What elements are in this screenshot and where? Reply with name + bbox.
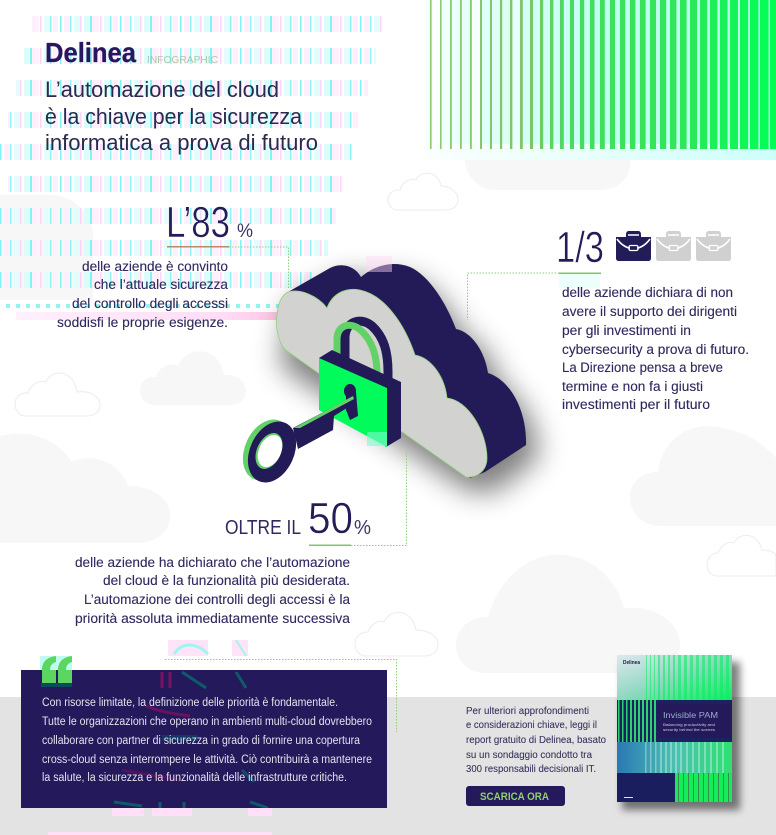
stat: one third: delle aziende dichiara di non	[562, 285, 733, 300]
download button: SCARICA ORA	[480, 791, 549, 803]
background clouds	[0, 150, 776, 673]
report cover: security behind the scenes	[663, 727, 715, 732]
glitch arcs above panel	[168, 640, 248, 656]
quote panel: cross-cloud senza interrompere le attività. Ciò contribuirà a mantenere	[42, 754, 372, 766]
stat: one third: per gli investimenti in	[562, 323, 691, 338]
stat: one third	[468, 223, 749, 412]
logo: INFOGRAPHIC	[147, 55, 218, 66]
stat: 83 percent	[57, 198, 288, 330]
stat: one third: investimenti per il futuro	[562, 397, 710, 412]
stat: over 50 percent	[75, 453, 406, 626]
stat: 83 percent: che l’attuale sicurezza	[94, 277, 228, 292]
stat: over 50 percent: priorità assoluta immediatamente successiva	[75, 611, 350, 626]
stat: over 50 percent: delle aziende ha dichiarato che l’automazione	[75, 555, 350, 570]
report cover: Delinea	[623, 660, 640, 666]
quote panel	[21, 640, 396, 835]
title: L’automazione del cloud	[45, 77, 279, 102]
logo	[45, 37, 218, 68]
report call to action text	[466, 705, 606, 775]
stat: 83 percent: %	[237, 221, 253, 242]
report call to action text: Per ulteriori approfondimenti	[466, 705, 589, 717]
title	[45, 77, 318, 155]
stat: over 50 percent: OLTRE IL	[225, 517, 301, 539]
report cover	[617, 655, 740, 810]
report cover: Invisible PAM	[663, 710, 718, 720]
stat: over 50 percent: L’automazione dei controlli degli accessi è la	[84, 592, 350, 607]
cloud front	[276, 289, 487, 477]
stat: one third: La Direzione pensa a breve	[562, 360, 723, 375]
cloud back	[288, 264, 526, 478]
icon: quotation mark	[40, 656, 72, 687]
quote panel: la salute, la sicurezza e la funzionalità delle infrastrutture critiche.	[42, 772, 347, 784]
stat: one third: 1/3	[556, 223, 604, 272]
stat: one third: avere il supporto dei dirigenti	[562, 304, 737, 319]
report call to action text: report gratuito di Delinea, basato	[466, 734, 606, 746]
title: è la chiave per la sicurezza	[45, 104, 303, 129]
glitch marks in panel	[114, 672, 268, 808]
title: informatica a prova di futuro	[45, 130, 318, 155]
glitch stripe rows	[0, 16, 384, 320]
stat: 83 percent: del controllo degli accessi	[72, 296, 228, 311]
stat: one third: cybersecurity a prova di futuro.	[562, 342, 749, 357]
top right green stripes	[424, 0, 776, 160]
quote panel: Tutte le organizzazioni che operano in ambienti multi-cloud dovrebbero	[42, 716, 372, 728]
stat: over 50 percent: %	[354, 517, 371, 539]
stat: over 50 percent: del cloud è la funzionalità più desiderata.	[103, 573, 350, 588]
grey footer band	[0, 697, 776, 835]
padlock	[319, 321, 401, 447]
report cover: Balancing productivity and	[663, 722, 715, 727]
report call to action text: 300 responsabili decisionali IT.	[466, 763, 596, 775]
glitch marks below panel	[48, 808, 272, 835]
download button	[466, 786, 565, 806]
quote panel: Con risorse limitate, la definizione delle priorità è fondamentale.	[42, 697, 338, 709]
report call to action text: su un sondaggio condotto tra	[466, 749, 592, 761]
illustration: cloud with padlock and key	[234, 256, 538, 492]
quote panel: collaborare con partner di sicurezza in grado di fornire una copertura	[42, 735, 361, 747]
icon: briefcase row	[616, 231, 731, 261]
report call to action text: e considerazioni chiave, leggi il	[466, 719, 597, 731]
stat: one third: termine e non fa i giusti	[562, 379, 703, 394]
stat: over 50 percent: 50	[308, 494, 353, 543]
stat: 83 percent: L’83	[166, 198, 230, 247]
key	[234, 396, 355, 490]
stat: 83 percent: soddisfi le proprie esigenze.	[57, 315, 228, 330]
logo: Delinea	[45, 37, 136, 68]
stat: 83 percent: delle aziende è convinto	[82, 259, 228, 274]
